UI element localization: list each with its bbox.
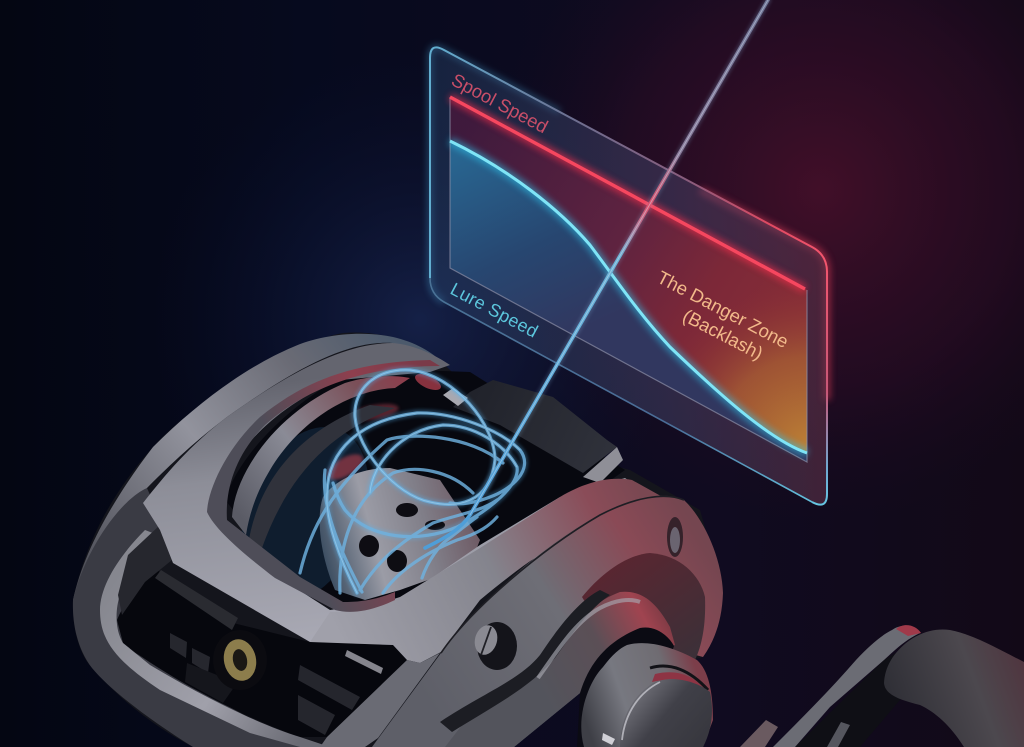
panel: speed chart: [430, 47, 827, 505]
knob bright tab: [602, 733, 615, 745]
lower window mechanism: [155, 570, 383, 735]
main line: [425, 0, 768, 548]
danger zone fill: [702, 317, 807, 452]
ring: [220, 636, 260, 684]
spool cylinder: [320, 468, 480, 600]
knob body: [581, 643, 713, 747]
chart axes: [450, 97, 807, 462]
screw slot: [481, 627, 491, 655]
spool holes: [359, 503, 445, 572]
knob base shadow: [577, 627, 674, 747]
panel top edge: [430, 47, 827, 272]
inner metal ring: [232, 376, 410, 535]
tangled line loops: [300, 0, 768, 593]
plate recess: [582, 553, 705, 660]
second ring: [248, 405, 395, 548]
ring hole: [231, 648, 249, 672]
side screw recess: [667, 517, 683, 557]
top crossbar block: [453, 380, 617, 473]
window interior: [225, 368, 625, 610]
lure speed line: [450, 141, 807, 453]
area above lure curve: [450, 97, 807, 453]
side plate: [372, 496, 723, 747]
crank handle: [740, 625, 1024, 747]
brass ring: [213, 630, 267, 690]
loop strands: [300, 370, 525, 593]
knob dark groove: [650, 666, 708, 690]
button blocks: [170, 633, 210, 673]
thumb bar: [143, 343, 650, 642]
spool speed line: [450, 97, 805, 289]
mechanism rods: [298, 665, 360, 735]
strut: [320, 653, 440, 747]
bright rod: [345, 650, 383, 674]
knob highlight: [622, 682, 660, 740]
spool flange: [217, 408, 393, 622]
knob: [577, 627, 713, 747]
screw: side plate: [667, 517, 683, 557]
reel body base: [73, 333, 723, 747]
frame light strip: [100, 530, 330, 747]
label: danger zone: The Danger Zone: [654, 266, 792, 352]
knob red rim: [652, 672, 708, 695]
outer frame band: [73, 334, 443, 615]
plate seam: [441, 496, 684, 653]
bar right extension: [310, 479, 668, 663]
crank grip: [884, 630, 1024, 747]
lower boss: [445, 592, 675, 747]
label: lure speed: Lure Speed: [447, 279, 541, 342]
small metal tab: [443, 388, 468, 406]
knob dome: [620, 679, 712, 747]
area under lure curve: [450, 141, 807, 462]
boss highlight: [538, 600, 640, 678]
red tint by tab: [413, 371, 443, 393]
label: backlash: (Backlash): [679, 305, 767, 364]
crank arm: [773, 626, 920, 747]
left dark gap: [118, 525, 172, 615]
lower window: [117, 570, 407, 737]
crank small link: [827, 722, 850, 747]
loop glow: [327, 370, 525, 593]
ring holder: [213, 630, 267, 690]
panel bottom edge: [430, 278, 812, 502]
upper rod: [155, 570, 238, 630]
plate groove: [440, 590, 610, 732]
spool red glow: [323, 449, 367, 485]
screw recess: [477, 622, 517, 670]
side screw head: [670, 527, 680, 553]
panel red glow: [700, 190, 827, 400]
strand highlights: [327, 370, 520, 593]
panel blue glow: [430, 47, 560, 302]
crank tab: [740, 720, 778, 747]
panel right edge: [812, 272, 827, 505]
screw: front plate: [471, 622, 517, 670]
lower frame dark: [73, 488, 300, 747]
dark block: [185, 663, 237, 703]
crossbar metal tab: [583, 447, 623, 483]
label: spool speed: Spool Speed: [448, 69, 552, 137]
crank arm tip: [896, 625, 921, 636]
window bezel: [207, 360, 440, 612]
screw head: [471, 623, 501, 657]
panel left edge: [429, 58, 431, 278]
crank dark hub: [795, 635, 925, 747]
panel glass: [430, 47, 827, 505]
red inner glow: top: [350, 401, 400, 423]
